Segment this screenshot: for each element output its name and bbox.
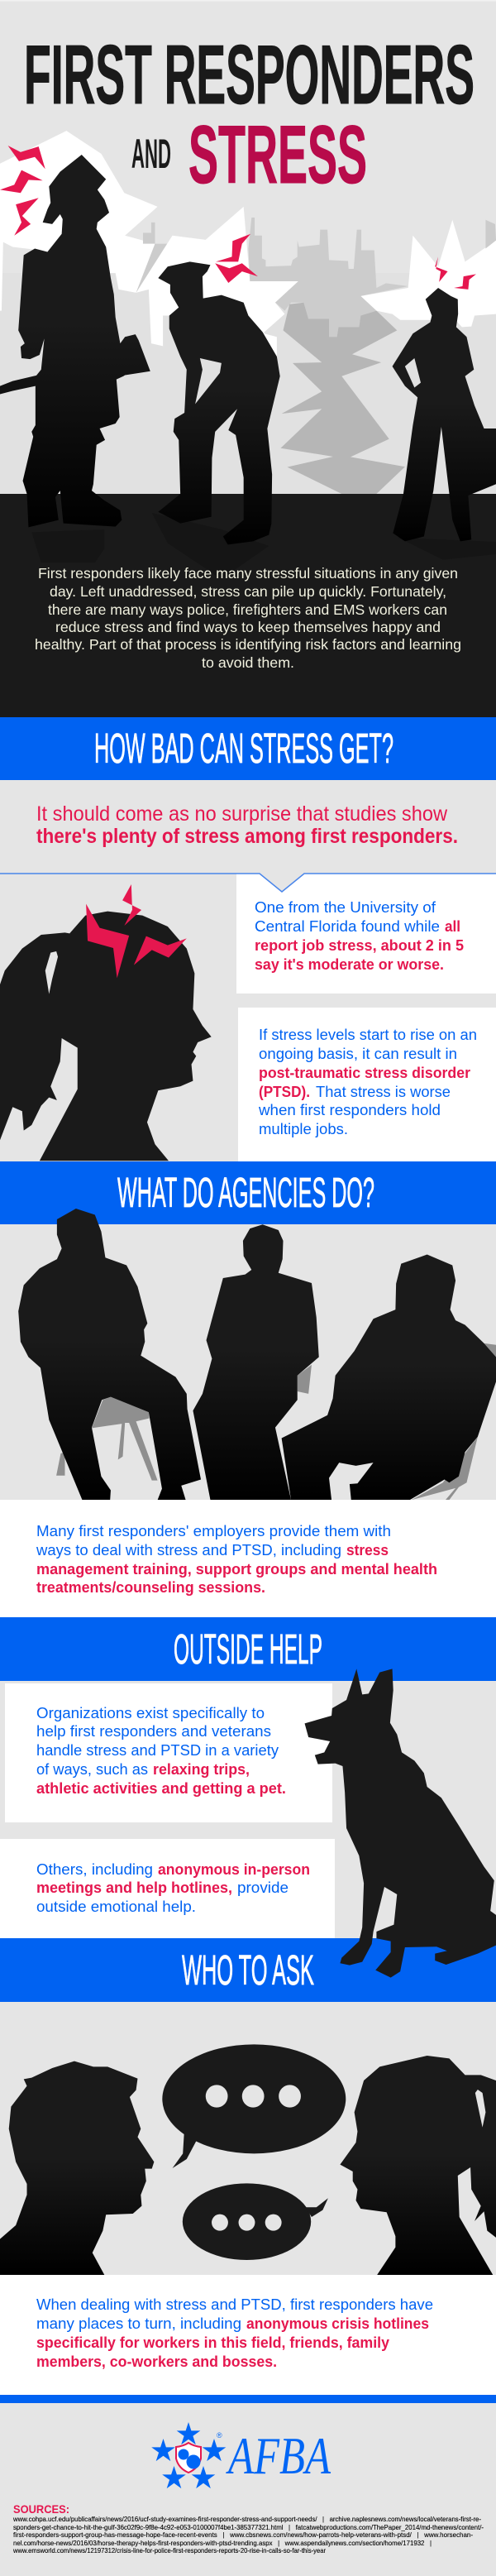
section band [0, 1938, 496, 2002]
text panel: hotlines: outside emotional help. [36, 1898, 196, 1915]
text panel: hotlines: anonymous in-person [158, 1861, 310, 1878]
section: who to ask: WHO TO ASK [182, 1946, 314, 1994]
registered mark: ® [217, 2431, 222, 2440]
sources: SOURCES: [13, 2502, 69, 2516]
agencies text panel: ways to deal with stress and PTSD, including [36, 1542, 341, 1559]
small speech bubble [183, 2183, 328, 2260]
intro text: there are many ways police, firefighters and EMS workers can [48, 601, 447, 618]
who to ask text panel [0, 2275, 496, 2395]
stat panel: PTSD: multiple jobs. [259, 1121, 348, 1137]
EMS worker silhouette [393, 288, 496, 541]
text panel: organizations: athletic activities and getting a pet. [36, 1780, 286, 1797]
stat panel: job stress: Central Florida found while [255, 918, 440, 935]
stat panel: PTSD: That stress is worse [316, 1084, 451, 1100]
agencies text panel: management training, support groups and mental health [36, 1561, 437, 1578]
stat panel: PTSD: (PTSD). [259, 1084, 310, 1100]
dog silhouette [305, 1669, 496, 1978]
stat panel: PTSD: ongoing basis, it can result in [259, 1046, 457, 1062]
sources: nel.com/horse-news/2016/03/horse-therapy-helps-first-responders-with-ptsd-trending.aspx | www.aspendailynews.com/section/home/171932 | [13, 2539, 432, 2547]
section: outside help: OUTSIDE HELP [174, 1626, 322, 1673]
text panel: hotlines: Others, including [36, 1861, 153, 1878]
logo wordmark: AFBA [226, 2426, 331, 2485]
text panel: hotlines [0, 1839, 335, 1938]
police officer silhouette [158, 261, 280, 544]
stat panel: job stress [0, 874, 496, 994]
floor reflections [31, 513, 496, 579]
sources: first-responders-support-group-has-message-hope-face-recent-events | www.cbsnews.com/news/how-parrots-help-veterans-with-ptsd/ | www.horsechan- [13, 2531, 473, 2539]
agencies text panel: Many first responders' employers provide them with [36, 1523, 391, 1539]
stress bolts [0, 146, 476, 290]
who to ask text panel: specifically for workers in this field, friends, family [36, 2334, 389, 2351]
intro text: day. Left unaddressed, stress can pile up quickly. Fortunately, [50, 583, 446, 600]
text panel: organizations: of ways, such as [36, 1761, 148, 1778]
stat panel: job stress: say it's moderate or worse. [255, 956, 444, 973]
lead statement [36, 802, 458, 848]
head stress bolts [86, 884, 187, 978]
hero backdrop: city skyline and bursts [0, 131, 496, 494]
text panel: organizations: relaxing trips, [153, 1761, 250, 1778]
woman head silhouette [0, 884, 212, 1161]
section: outside help [0, 1617, 496, 1938]
stat panel: job stress: One from the University of [255, 899, 436, 916]
intro text: to avoid them. [202, 654, 294, 671]
lead statement: It should come as no surprise that studies show [36, 802, 448, 826]
hero panel [0, 0, 496, 717]
text panel: organizations: handle stress and PTSD in a variety [36, 1742, 279, 1759]
footer rule [0, 2395, 496, 2403]
stat panel: job stress: report job stress, about 2 in 5 [255, 937, 464, 954]
lead statement: there's plenty of stress among first responders. [36, 825, 458, 848]
stat panel: PTSD: If stress levels start to rise on an [259, 1027, 477, 1043]
intro text: reduce stress and find ways to keep themselves happy and [55, 619, 441, 635]
section: who to ask [0, 1669, 496, 2395]
who to ask text panel: anonymous crisis hotlines [246, 2315, 429, 2332]
agencies text panel: treatments/counseling sessions. [36, 1579, 265, 1596]
stat panel: PTSD: post-traumatic stress disorder [259, 1065, 470, 1081]
text panel: hotlines: provide [237, 1879, 289, 1896]
man head silhouette [0, 2061, 154, 2275]
AFBA logo [151, 2422, 331, 2488]
who to ask text panel: members, co-workers and bosses. [36, 2353, 277, 2370]
stat panel: PTSD: when first responders hold [258, 1102, 441, 1118]
large speech bubble [162, 2044, 346, 2168]
agencies text panel [0, 1500, 496, 1617]
agencies text panel: stress [346, 1542, 389, 1559]
sources: www.emsworld.com/news/12197312/crisis-line-for-police-first-responders-reports-20-rise-in-calls-so-far-this-year [12, 2546, 326, 2554]
conversation illustration [0, 2044, 496, 2275]
title: AND [131, 131, 171, 177]
seated group illustration [18, 1209, 496, 1500]
section band [0, 1161, 496, 1224]
stat panel: PTSD [238, 1008, 496, 1161]
logo stars [151, 2422, 226, 2488]
who to ask text panel: many places to turn, including [36, 2315, 241, 2332]
sources [12, 2502, 484, 2554]
section band [0, 1617, 496, 1681]
stat panel: job stress: all [445, 918, 460, 935]
firefighter silhouette [0, 155, 150, 527]
intro text [35, 565, 461, 671]
text panel: organizations [5, 1683, 332, 1822]
who to ask text panel: When dealing with stress and PTSD, first responders have [36, 2296, 433, 2313]
text panel: hotlines: meetings and help hotlines, [36, 1879, 232, 1896]
ground [0, 494, 496, 717]
section: how bad can stress get [0, 717, 496, 1161]
woman head silhouette [340, 2056, 496, 2275]
title [24, 29, 475, 200]
intro text: First responders likely face many stressful situations in any given [38, 565, 458, 582]
logo shield [176, 2443, 201, 2473]
text panel: organizations: help first responders and veterans [36, 1723, 271, 1740]
text panel: organizations: Organizations exist specifically to [36, 1705, 265, 1721]
section band [0, 717, 496, 780]
intro text: healthy. Part of that process is identifying risk factors and learning [35, 636, 461, 653]
section: what do agencies do [0, 1161, 496, 1617]
